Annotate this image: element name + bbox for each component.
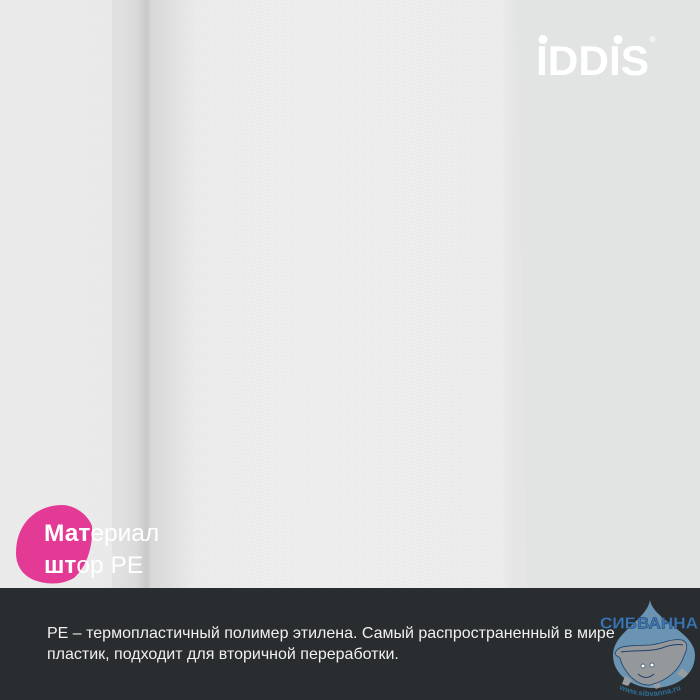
face — [641, 664, 645, 668]
logo: IDDIS: IDDIS — [536, 37, 649, 84]
website — [619, 689, 682, 696]
watermark: Sibvanna logo: www.sibvanna.ru — [620, 686, 681, 696]
description text — [47, 625, 615, 663]
heading: material: Материал — [44, 520, 159, 547]
heading: material — [44, 520, 159, 579]
brand name: СИБВАННА — [600, 616, 698, 632]
bathtub — [615, 640, 688, 689]
description text: пластик, подходит для вторичной переработки. — [47, 646, 399, 663]
description text: PE – термопластичный полимер этилена. Самый распространенный в мире — [47, 625, 615, 642]
heading: material: штор PE — [44, 552, 143, 579]
water drop — [613, 600, 695, 688]
